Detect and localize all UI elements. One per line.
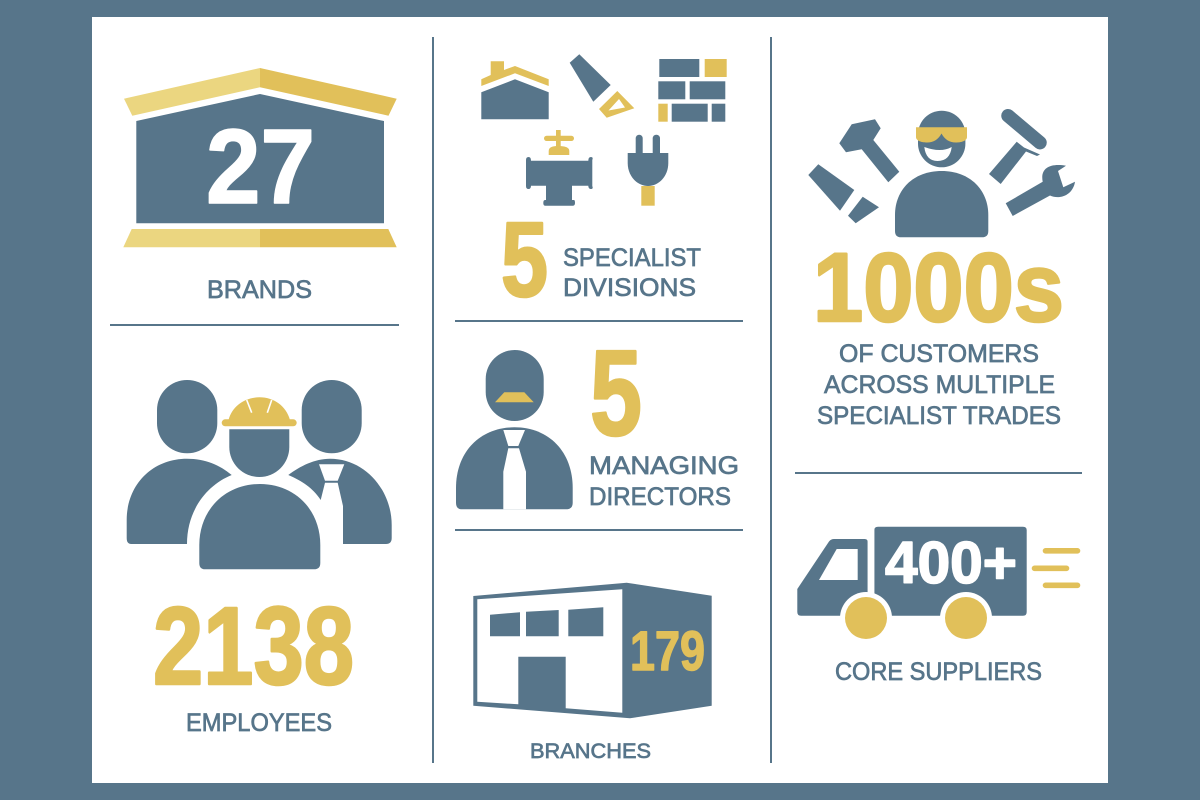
label: brands: BRANDS (207, 276, 312, 304)
icon: warehouse with 27 (123, 68, 397, 247)
icon: saw (570, 54, 634, 118)
label: customers across trades (817, 340, 1061, 430)
number: 2138: 2138 (153, 585, 354, 708)
label: managing directors: DIRECTORS (589, 483, 731, 511)
label: branches: BRANCHES (530, 740, 651, 763)
number: 5: 5 (590, 325, 642, 461)
panel: core suppliers (797, 520, 1080, 686)
panel: customers (808, 111, 1075, 430)
label: specialist divisions: DIVISIONS (563, 274, 696, 302)
number: 5: 5 (501, 201, 548, 319)
panel: managing directors (456, 325, 739, 511)
icon: branch building with 179 (473, 583, 712, 718)
icon: director with tie (456, 350, 573, 509)
icon: tradesman with tools (808, 111, 1075, 237)
icon: delivery truck with 400+ (797, 520, 1027, 644)
label: managing directors (589, 452, 739, 511)
panel: employees (127, 380, 392, 737)
panel: brands (123, 68, 397, 304)
label: employees: EMPLOYEES (186, 709, 332, 737)
label: customers across trades: ACROSS MULTIPLE (824, 371, 1055, 399)
label: customers across trades: OF CUSTOMERS (839, 340, 1039, 368)
icon: electric plug (628, 135, 668, 206)
label: core suppliers: CORE SUPPLIERS (835, 658, 1042, 686)
icon: brick wall (658, 59, 727, 122)
label: managing directors: MANAGING (589, 452, 739, 480)
icon: three people with hard hat (127, 380, 392, 569)
icon: warehouse with 27: 27 (206, 108, 315, 226)
icon: house (481, 61, 549, 119)
icon: speed lines (1032, 548, 1080, 588)
panel: branches (473, 583, 712, 763)
icon: branch building with 179: 179 (630, 619, 705, 682)
number: 1000s: 1000s (813, 233, 1064, 342)
panel: specialist divisions (481, 54, 727, 319)
icon: delivery truck with 400+: 400+ (885, 530, 1017, 596)
icon: pipe and tap (526, 130, 593, 206)
label: customers across trades: SPECIALIST TRADES (817, 402, 1061, 430)
label: specialist divisions (563, 244, 701, 302)
label: specialist divisions: SPECIALIST (563, 244, 701, 272)
